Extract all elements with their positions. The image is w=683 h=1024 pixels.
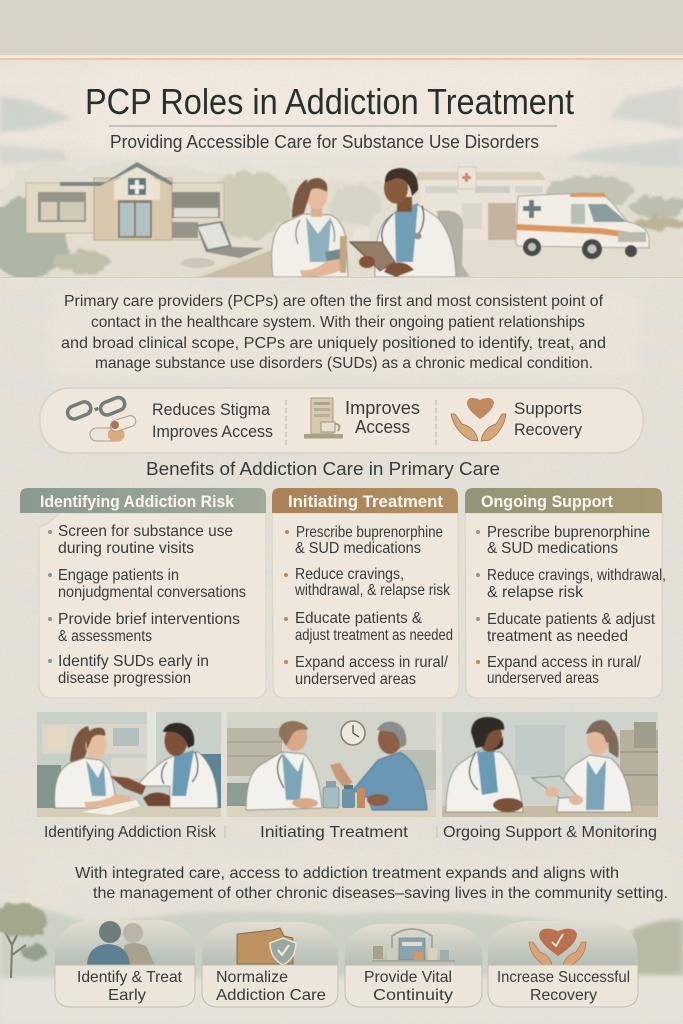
bullet list: Prescribe buprenorphine: [296, 524, 443, 541]
icon: clock: [341, 721, 365, 745]
bullet list: Engage patients in: [58, 567, 179, 584]
bullet list: [476, 524, 666, 687]
bullet list: & assessments: [58, 628, 152, 645]
panel: identifying addiction risk: [20, 488, 266, 698]
icon: chair: [437, 211, 470, 277]
icon: medicine bottles: [323, 781, 365, 808]
illustration: ongoing support: [442, 712, 658, 817]
photo captions: Orgoing Support & Monitoring: [443, 824, 657, 841]
bullet list: & relapse risk: [487, 584, 584, 601]
icon: tree: [0, 903, 47, 978]
pill label: reduces stigma: Reduces Stigma: [152, 401, 271, 419]
figure: male doctor: [350, 168, 456, 277]
label: Recovery: [530, 987, 597, 1004]
illustration: initiating treatment: [227, 712, 436, 817]
label: Addiction Care: [216, 987, 326, 1004]
card header: [20, 488, 266, 513]
icon: people: [87, 921, 155, 965]
panel: benefits pill: [40, 388, 643, 453]
figure: female doctor: [272, 178, 348, 277]
label: Early: [108, 987, 146, 1004]
intro paragraph: and broad clinical scope, PCPs are uniquely positioned to identify, treat, and: [61, 335, 606, 352]
figure: patient: [330, 722, 427, 810]
pill label: supports recovery: [514, 399, 582, 439]
icon: medical supplies: [372, 929, 455, 962]
bullet list: Identify SUDs early in: [58, 653, 209, 670]
foreground band line: [0, 277, 683, 278]
pill label: improves access: [345, 398, 420, 437]
icon: heart in hands: [529, 929, 586, 965]
bullet list: & SUD medications: [295, 540, 421, 557]
bullet list: treatment as needed: [487, 628, 628, 645]
panel: initiating treatment: [272, 488, 459, 698]
pill label: improves access: Access: [355, 417, 410, 437]
figure: male doctor: [446, 717, 523, 812]
card header: Initiating Treatment: [288, 493, 444, 511]
icon: document stand: [304, 398, 343, 438]
bullet list: [48, 523, 246, 687]
label: Identify & Treat: [77, 969, 183, 986]
figure: man: [110, 723, 218, 808]
figure: doctor: [246, 721, 322, 810]
bullet list: Educate patients &: [295, 610, 422, 627]
bullet list: underserved areas: [487, 670, 599, 687]
card: identify and treat early: [55, 920, 195, 1007]
pill label: supports recovery: Recovery: [514, 420, 582, 439]
hero background hills and trees: [0, 160, 683, 280]
photo captions: Initiating Treatment: [260, 824, 409, 841]
section heading: Benefits of Addiction Care in Primary Care: [146, 459, 500, 479]
label: [77, 969, 183, 1004]
distant cloud washes behind title: [0, 86, 683, 168]
pill label: supports recovery: Supports: [514, 399, 582, 418]
label: Provide Vital: [364, 969, 452, 986]
card header: Ongoing Support: [481, 493, 613, 511]
label: Continuity: [373, 987, 453, 1004]
intro paragraph: Primary care providers (PCPs) are often the first and most consistent point of: [64, 293, 604, 310]
top blank band: [0, 0, 683, 60]
icon: clinic building: [26, 162, 224, 240]
icon: broken chain and capsule: [66, 396, 137, 441]
pill label: improves access: Improves: [345, 398, 420, 418]
title: PCP Roles in Addiction Treatment: [85, 81, 574, 122]
bullet list: & SUD medications: [487, 540, 618, 557]
bullet list: Reduce cravings,: [295, 566, 404, 583]
title rule: [109, 125, 557, 127]
bullet list: Prescribe buprenorphine: [487, 524, 650, 541]
label: Normalize: [216, 969, 288, 986]
label: [216, 969, 326, 1004]
bullet list: Expand access in rural/: [295, 654, 449, 671]
subtitle: Providing Accessible Care for Substance Use Disorders: [110, 132, 539, 152]
bullet list: disease progression: [58, 670, 191, 687]
intro paragraph: [61, 293, 606, 372]
icon: desk wall with laptop: [181, 221, 272, 278]
bullet list: underserved areas: [295, 671, 416, 688]
bullet list: during routine visits: [58, 540, 194, 557]
figure: woman: [55, 726, 132, 808]
bullet list: nonjudgmental conversations: [58, 584, 246, 601]
card: provide vital continuity: [345, 924, 482, 1007]
bullet list: withdrawal, & relapse risk: [294, 582, 451, 599]
bullet list: [284, 524, 453, 688]
closing statement: the management of other chronic diseases–saving lives in the community setting.: [93, 885, 668, 902]
closing statement: [75, 865, 668, 902]
closing statement: With integrated care, access to addiction treatment expands and aligns with: [75, 865, 619, 882]
figure: female doctor: [532, 720, 632, 812]
card: increase successful recovery: [488, 921, 638, 1007]
icon: hospital in distance: [416, 167, 546, 240]
bullet list: Screen for substance use: [58, 523, 233, 540]
icon: heart in hands: [451, 398, 506, 441]
card header: Identifying Addiction Risk: [40, 493, 235, 511]
intro paragraph: contact in the healthcare system. With their ongoing patient relationships: [91, 314, 585, 331]
icon: ambulance: [516, 193, 649, 259]
bullet list: Educate patients & adjust: [487, 611, 656, 628]
panel: ongoing support: [465, 488, 666, 698]
pill label: reduces stigma: [152, 401, 273, 441]
bottom landscape: [0, 903, 683, 1024]
hero illustration: [0, 160, 683, 280]
bullet list: adjust treatment as needed: [295, 627, 453, 644]
card header: [465, 488, 662, 513]
bullet list: Expand access in rural/: [487, 654, 642, 671]
photo captions: Identifying Addiction Risk: [44, 824, 216, 841]
label: Increase Successful: [497, 969, 630, 986]
bullet list: Provide brief interventions: [58, 611, 240, 628]
photo captions: [44, 824, 657, 841]
label: [497, 969, 630, 1004]
card: normalize addiction care: [202, 922, 338, 1007]
label: [364, 969, 453, 1004]
card header: [272, 488, 458, 513]
icon: wallet and shield: [237, 928, 296, 965]
pill label: reduces stigma: Improves Access: [152, 423, 273, 441]
intro paragraph: manage substance use disorders (SUDs) as a chronic medical condition.: [95, 355, 593, 372]
illustration: identifying addiction risk: [37, 712, 221, 817]
